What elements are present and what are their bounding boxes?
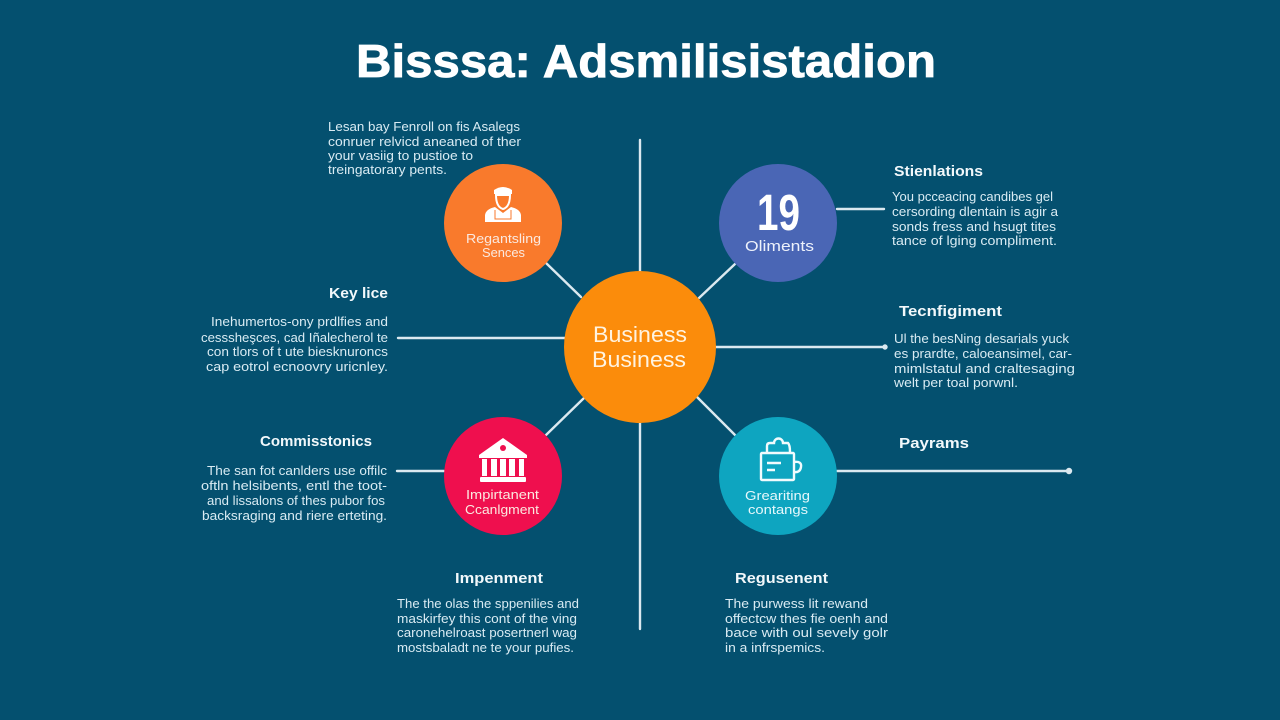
node: red Impirtanent Ccanlgment: Ccanlgment [465,502,539,517]
node: red Impirtanent Ccanlgment: Impirtanent [466,487,539,502]
text block: Key lice: con tlors of t ute biesknuroncs [207,344,389,359]
node: orange Regantsling Sences: Sences [482,245,525,260]
text block: Commisstonics: Commisstonics [260,433,372,450]
text block: Commisstonics [201,433,388,523]
text block: Stienlations [892,163,1059,248]
text block: Impenment [397,570,579,655]
text block: Regusenent: bace with oul sevely golr [725,625,889,640]
text block: Stienlations: sonds fress and hsugt tites [892,219,1057,234]
node: teal Greariting contangs: Greariting [745,488,810,503]
node: blue Oliments [719,164,837,282]
center hub: Business [564,271,716,423]
text block: Key lice [201,285,389,374]
node: teal Greariting contangs: contangs [748,502,809,517]
text block: Key lice: Key lice [329,285,388,302]
text block: Stienlations: cersording dlentain is agir a [892,204,1059,219]
text block: Impenment: The the olas the sppenilies and [397,596,579,611]
center hub: Business: Business [592,347,686,372]
text block: Impenment: caronehelroast posertnerl wag [397,625,577,640]
text block: Impenment: Impenment [455,570,543,587]
text block: Tecnfigiment [893,303,1075,390]
text block: Key lice: cap eotrol ecnoovry uricnley. [206,359,388,374]
text block: Stienlations: You pcceacing candibes gel [892,189,1053,204]
text block: Tecnfigiment: Ul the besNing desarials yuck [894,331,1070,346]
text block: Regusenent: offectcw thes fie oenh and [725,611,888,626]
text block: Commisstonics: backsraging and riere erteting. [202,508,387,523]
text block: Tecnfigiment: mimlstatul and craltesaging [894,361,1075,376]
title: Bisssa: Adsmilisistadion [356,35,936,87]
text block: Impenment: maskirfey this cont of the ving [397,611,577,626]
text block: Tecnfigiment: Tecnfigiment [899,303,1002,320]
center hub: Business: Business [593,322,687,347]
text block: Regusenent: in a infrspemics. [725,640,825,655]
text block: Impenment: mostsbaladt ne te your pufies. [397,640,574,655]
text block: Stienlations: Stienlations [894,163,983,180]
icon: bank building [479,438,527,482]
text block: Key lice: cesssheşces, cad Iñalecherol te [201,330,388,345]
text block: Stienlations: tance of lging compliment. [892,233,1057,248]
node: orange Regantsling Sences [444,164,562,282]
node: blue Oliments: Oliments [745,238,814,255]
icon: worker [485,187,521,222]
text block: Tecnfigiment: welt per toal porwnl. [893,375,1018,390]
connector lines [397,140,1071,629]
text block: top left intro [328,119,522,177]
text block: Commisstonics: The san fot canlders use offilc [207,463,388,478]
heading: Payrams: Payrams [899,435,969,452]
text block: top left intro: treingatorary pents. [328,162,447,177]
text block: Regusenent [725,570,889,655]
node: blue Oliments: 19 [757,184,800,241]
node: orange Regantsling Sences: Regantsling [466,231,541,246]
text block: Tecnfigiment: es prardte, caloeansimel, car- [894,346,1072,361]
text block: top left intro: Lesan bay Fenroll on fis Asalegs [328,119,521,134]
node: teal Greariting contangs [719,417,837,535]
text block: top left intro: your vasiig to pustioe to [328,148,473,163]
text block: Commisstonics: oftln helsibents, entl the toot- [201,478,387,493]
text block: Key lice: Inehumertos-ony prdlfies and [211,314,388,329]
text block: Regusenent: The purwess lit rewand [725,596,868,611]
node: red Impirtanent Ccanlgment [444,417,562,535]
text block: Commisstonics: and lissalons of thes pubor fos [207,493,386,508]
text block: Regusenent: Regusenent [735,570,828,587]
icon: clipboard [761,438,801,480]
text block: top left intro: conruer relvicd aneaned of ther [328,134,522,149]
